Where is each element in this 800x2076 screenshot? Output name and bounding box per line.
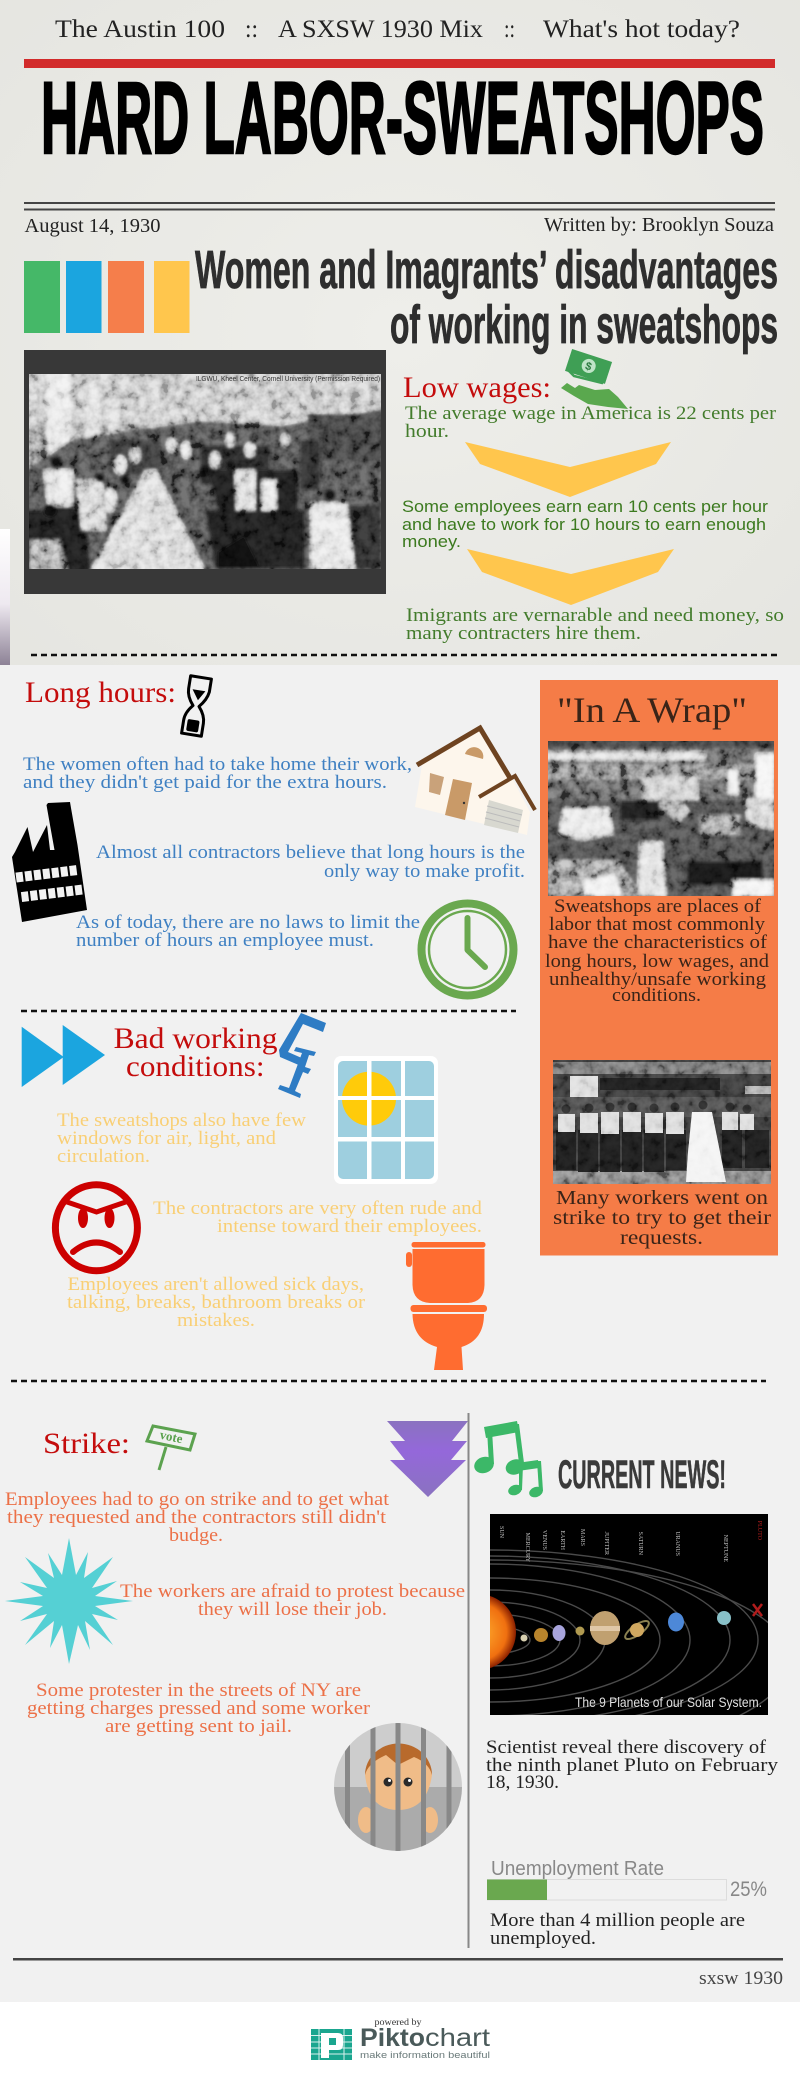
dashed divider (31, 654, 777, 656)
text: go on strike: budge. (169, 1525, 223, 1546)
text: some employees: money. (402, 532, 461, 551)
heading: strike: Strike: (43, 1427, 130, 1460)
logo: piktochart: Pikto (360, 2024, 425, 2052)
text: few windows: circulation. (57, 1146, 150, 1167)
text: no laws: As of today, there are no laws to limit the (76, 912, 420, 933)
photo: solar system: JUPITER (603, 1532, 609, 1555)
masthead links: The Austin 100 (55, 16, 225, 43)
photo: solar system (490, 1514, 768, 1715)
icon: money in hand (561, 349, 628, 409)
text: some employees (402, 497, 768, 551)
photo: solar system: MERCURY (524, 1533, 530, 1563)
text: average wage: hour. (405, 421, 449, 442)
icon: teal starburst (5, 1538, 133, 1664)
double rule and dateline (24, 202, 775, 237)
text: average wage (405, 403, 777, 442)
text: some employees: and have to work for 10 hours to earn enough (402, 515, 766, 534)
photo: solar system: SATURN (637, 1532, 643, 1556)
heading: bad working conditions (114, 1022, 278, 1083)
text: protesters jailed: Some protester in the streets of NY are (36, 1680, 361, 1701)
icon: vote sign: vote (158, 1427, 184, 1446)
icon: window (334, 1056, 438, 1184)
text: definition: unhealthy/unsafe working (549, 969, 767, 990)
heading: in a wrap: "In A Wrap" (557, 690, 747, 730)
red bar (24, 59, 775, 68)
double rule and dateline: Written by: Brooklyn Souza (544, 214, 774, 236)
text: definition: conditions. (612, 985, 701, 1006)
text: definition: have the characteristics of (548, 932, 768, 953)
photo: solar system: NEPTUNE (722, 1535, 728, 1562)
text: contractors believe: Almost all contractors believe that long hours is the (96, 842, 525, 863)
text: contractors rude (153, 1198, 483, 1237)
text: went on strike: Many workers went on (556, 1187, 768, 1209)
text: definition: Sweatshops are places of (554, 896, 762, 917)
dashed divider (11, 1380, 766, 1382)
photo: solar system: MARS (579, 1529, 585, 1546)
text: no sick days: mistakes. (177, 1310, 255, 1331)
double rule and dateline: August 14, 1930 (24, 215, 160, 237)
section: low wages (402, 349, 784, 644)
text: no sick days: Employees aren't allowed sick days, (68, 1274, 364, 1295)
text: imigrants: many contracters hire them. (406, 623, 641, 644)
headline (195, 240, 778, 355)
section: strike (5, 1421, 468, 1851)
text: afraid: they will lose their job. (198, 1599, 387, 1620)
text: contractors believe (96, 842, 525, 882)
icon: clock (422, 904, 514, 996)
chart: unemployment rate: 25% (730, 1878, 767, 1901)
text: go on strike: they requested and the contractors still didn't (7, 1507, 387, 1528)
text: went on strike (553, 1187, 771, 1249)
photo: solar system: EARTH (559, 1530, 565, 1551)
photo: solar system: SUN (498, 1526, 504, 1539)
text: no sick days (67, 1274, 366, 1331)
icon: toilet (406, 1242, 487, 1370)
masthead links: :: (245, 16, 258, 43)
text: 4 million: More than 4 million people are (490, 1910, 745, 1931)
logo: piktochart (311, 2018, 490, 2061)
masthead links: What's hot today? (543, 16, 740, 43)
photo: solar system: PLUTO (756, 1521, 762, 1541)
arrow: chevron 1 (465, 442, 671, 497)
heading: bad working conditions: Bad working (114, 1022, 278, 1055)
photo: solar system: The 9 Planets of our Solar System. (575, 1694, 762, 1710)
text: some employees: Some employees earn earn 10 cents per hour (402, 497, 768, 516)
icon: clamp (278, 1013, 326, 1098)
photo: solar system: VENUS (541, 1530, 547, 1550)
text: went on strike: strike to try to get their (553, 1207, 771, 1229)
text: afraid: The workers are afraid to protest because (120, 1581, 465, 1602)
text: imigrants: Imigrants are vernarable and need money, so (406, 605, 784, 626)
text: contractors rude: The contractors are very often rude and (153, 1198, 483, 1219)
text: pluto discovery: 18, 1930. (486, 1772, 559, 1793)
text: take home work (23, 754, 412, 793)
icon: music notes (472, 1421, 544, 1499)
text: went on strike: requests. (620, 1227, 703, 1249)
text: contractors believe: only way to make profit. (324, 861, 525, 882)
colour bars (24, 261, 190, 333)
masthead links: A SXSW 1930 Mix (278, 16, 484, 43)
text: no sick days: talking, breaks, bathroom breaks or (67, 1292, 366, 1313)
icon: house (415, 728, 535, 835)
text: no laws (76, 912, 420, 951)
section: long hours (12, 676, 535, 996)
icon: logo grid (311, 2029, 352, 2060)
text: few windows (57, 1110, 306, 1167)
masthead links: :: (504, 16, 515, 43)
chart: unemployment rate (487, 1858, 767, 1901)
text: pluto discovery: Scientist reveal there discovery of (486, 1737, 767, 1758)
photo: workshop interior (545, 738, 777, 899)
text: go on strike: Employees had to go on strike and to get what (5, 1489, 390, 1510)
chart: unemployment rate: Unemployment Rate (491, 1858, 664, 1880)
icon: angry face (55, 1185, 137, 1271)
text: few windows: windows for air, light, and (57, 1128, 277, 1149)
text: protesters jailed: getting charges pressed and some worker (27, 1698, 371, 1719)
arrow: purple down arrows (387, 1421, 468, 1497)
text: afraid (120, 1581, 465, 1620)
logo: piktochart: chart (425, 2024, 490, 2052)
text: take home work: and they didn't get paid for the extra hours. (23, 772, 387, 793)
text: pluto discovery: the ninth planet Pluto on February (486, 1755, 779, 1776)
text: definition: long hours, low wages, and (545, 951, 770, 972)
text: go on strike (5, 1489, 390, 1546)
arrow: chevron 2 (467, 549, 674, 605)
text: protesters jailed (27, 1680, 371, 1737)
text: 4 million (490, 1910, 745, 1949)
panel: in a wrap (540, 680, 778, 1256)
section: bad working conditions (22, 1013, 487, 1370)
photo: strikers (553, 1060, 771, 1184)
icon: prisoner behind bars (334, 1723, 462, 1851)
icon: factory (12, 802, 87, 922)
text: average wage: The average wage in America is 22 cents per (405, 403, 777, 424)
icon: double triangles (22, 1025, 105, 1087)
logo: piktochart: make information beautiful (360, 2050, 490, 2061)
icon: money in hand: $ (584, 360, 593, 374)
icon: hourglass (182, 676, 211, 736)
icon: vote sign (147, 1426, 195, 1470)
text: protesters jailed: are getting sent to jail. (105, 1716, 292, 1737)
footer rule (13, 1958, 783, 1960)
text: 4 million: unemployed. (490, 1928, 596, 1949)
text: few windows: The sweatshops also have few (57, 1110, 306, 1131)
section: current news (474, 1421, 778, 1948)
text: definition (545, 896, 770, 1006)
text: no laws: number of hours an employee must. (76, 930, 374, 951)
footer text: sxsw 1930 (699, 1968, 783, 1989)
photo: solar system: URANUS (674, 1531, 680, 1556)
text: definition: labor that most commonly (549, 914, 766, 935)
text: pluto discovery (486, 1737, 779, 1793)
vertical divider (468, 1413, 470, 1948)
heading: bad working conditions: conditions: (126, 1050, 264, 1083)
heading: long hours: Long hours: (25, 676, 176, 709)
dashed divider (21, 1010, 516, 1012)
text: imigrants (406, 605, 784, 644)
photo: sweatshop floor: ILGWU, Kheel Center, Cornell University (Permission Required) (196, 376, 380, 383)
text: take home work: The women often had to take home their work, (23, 754, 412, 775)
photo: sweatshop floor (24, 350, 386, 594)
heading: low wages: Low wages: (403, 371, 551, 404)
logo: piktochart: powered by (374, 2018, 422, 2028)
text: contractors rude: intense toward their employees. (217, 1216, 482, 1237)
masthead links (55, 16, 740, 43)
